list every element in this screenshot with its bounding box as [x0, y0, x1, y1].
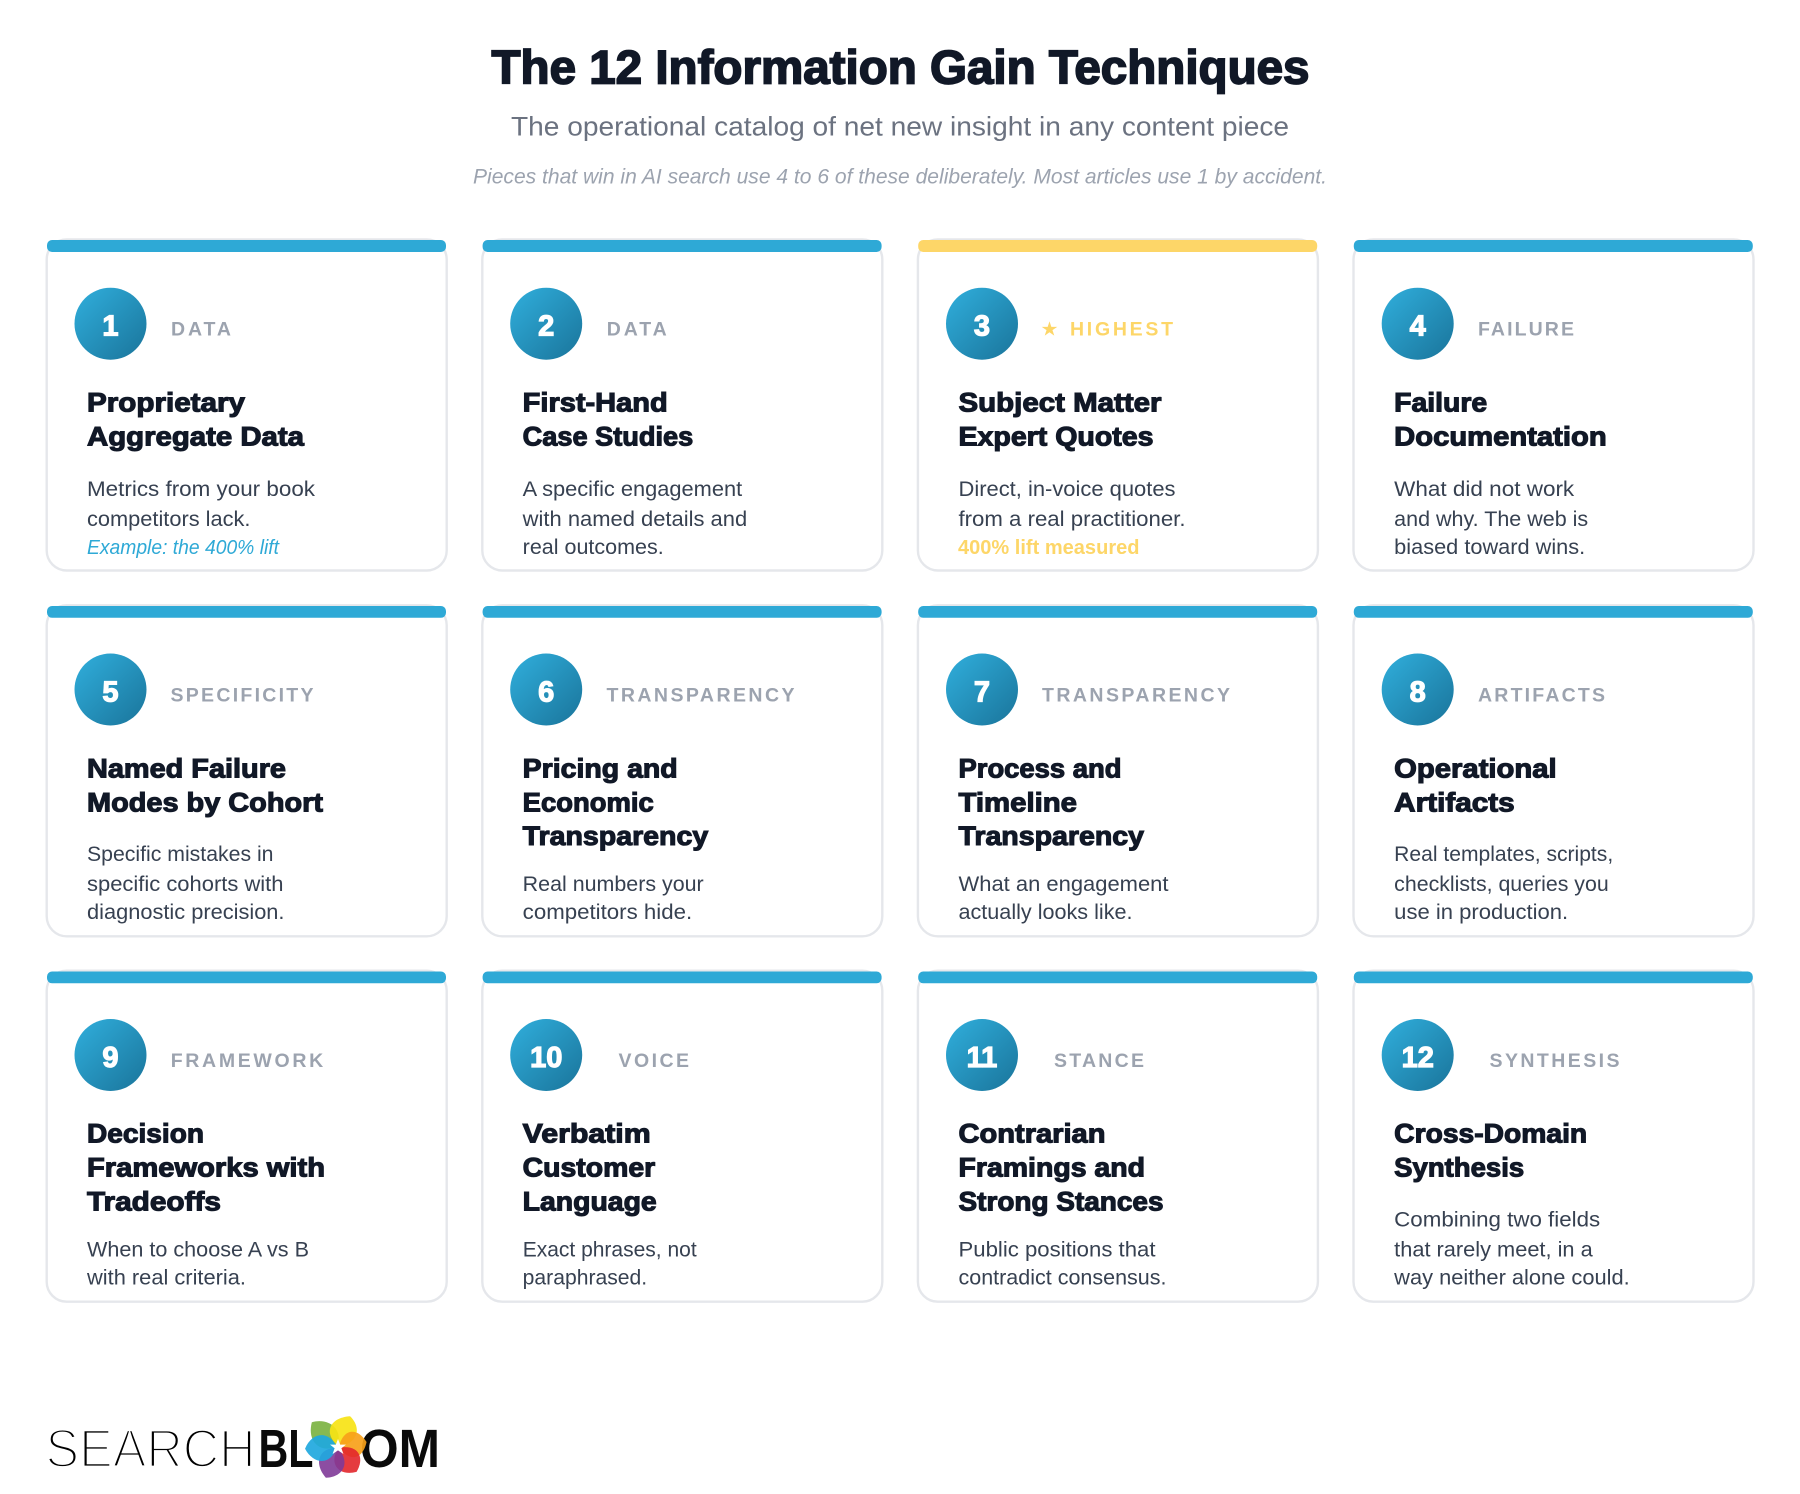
logo: Searchbloom: BL: [258, 1420, 314, 1479]
number badge 6: 6: [538, 676, 554, 708]
description: competitors hide.: [523, 901, 692, 924]
description: [958, 1239, 1166, 1290]
tag: artifacts: ARTIFACTS: [1478, 685, 1605, 707]
description: competitors lack.: [87, 508, 250, 531]
tag: voice: VOICE: [618, 1050, 689, 1072]
number badge 10: [510, 1019, 582, 1091]
description: Real templates, scripts,: [1394, 843, 1613, 866]
description: Exact phrases, not: [523, 1239, 697, 1262]
card 1: Proprietary Aggregate Data: [47, 240, 447, 570]
card 9: Decision Frameworks with Tradeoffs: [47, 971, 447, 1302]
description: paraphrased.: [523, 1267, 647, 1290]
description: [522, 478, 747, 559]
heading: Transparency: [523, 821, 708, 851]
number badge 11: [946, 1019, 1018, 1091]
heading: Named Failure: [87, 754, 286, 784]
description: [523, 1239, 697, 1290]
card 4: Failure Documentation: [1354, 240, 1754, 570]
tag: transparency: TRANSPARENCY: [606, 685, 794, 707]
heading: [87, 1119, 325, 1216]
description: [87, 478, 316, 559]
heading: Frameworks with: [87, 1153, 325, 1183]
tag: failure: FAILURE: [1478, 319, 1574, 341]
card 6: Pricing and Economic Transparency: [482, 605, 882, 936]
heading: [958, 388, 1162, 452]
description: Metrics from your book: [87, 478, 316, 501]
heading: Verbatim: [523, 1119, 651, 1149]
title: The 12 Information Gain Techniques: [492, 40, 1310, 93]
heading: Documentation: [1394, 422, 1607, 452]
number badge 5: [74, 654, 146, 726]
heading: [87, 754, 323, 818]
description: Combining two fields: [1394, 1209, 1600, 1232]
description: [523, 873, 704, 924]
heading: Decision: [87, 1119, 204, 1149]
number badge 2: 2: [538, 311, 554, 343]
description: Public positions that: [958, 1239, 1156, 1262]
number badge 8: 8: [1410, 676, 1426, 708]
number badge 4: [1382, 288, 1454, 360]
heading: [1394, 1119, 1587, 1183]
description: Direct, in-voice quotes: [958, 478, 1176, 501]
tag: framework: FRAMEWORK: [171, 1050, 323, 1072]
card 2: First-Hand Case Studies: [482, 240, 882, 570]
heading: First-Hand: [523, 388, 668, 418]
description: Real numbers your: [523, 873, 704, 896]
description: [958, 478, 1186, 559]
number badge 1: 1: [102, 311, 119, 343]
heading: Operational: [1394, 754, 1557, 784]
heading: Subject Matter: [958, 388, 1162, 418]
heading: [87, 388, 304, 452]
heading: [1394, 754, 1557, 818]
number badge 4: 4: [1410, 311, 1426, 343]
heading: Modes by Cohort: [87, 788, 323, 818]
heading: Contrarian: [958, 1119, 1106, 1149]
heading: [958, 754, 1144, 851]
tag: specificity: SPECIFICITY: [170, 685, 314, 707]
heading: Customer: [523, 1153, 655, 1183]
number badge 2: [510, 288, 582, 360]
heading: Strong Stances: [958, 1186, 1164, 1216]
number badge 5: 5: [102, 676, 119, 708]
heading: Synthesis: [1394, 1153, 1524, 1183]
description: biased toward wins.: [1394, 536, 1585, 559]
heading: [958, 1119, 1164, 1216]
description: use in production.: [1394, 901, 1568, 924]
card 5: Named Failure Modes by Cohort: [47, 605, 447, 936]
heading: Aggregate Data: [87, 422, 304, 452]
heading: [523, 388, 693, 452]
description: contradict consensus.: [958, 1267, 1166, 1290]
description: [86, 1239, 309, 1290]
tag: highest: HIGHEST: [1070, 319, 1173, 341]
logo: Searchbloom: OM: [360, 1420, 440, 1479]
number badge 11: 11: [967, 1042, 997, 1074]
heading: Language: [523, 1186, 657, 1216]
heading: [523, 1119, 657, 1216]
heading: Artifacts: [1394, 788, 1515, 818]
number badge 8: [1382, 654, 1454, 726]
description: and why. The web is: [1394, 508, 1588, 531]
description: way neither alone could.: [1393, 1267, 1630, 1290]
description: [1393, 1209, 1630, 1290]
heading: Process and: [958, 754, 1122, 784]
tag: stance: STANCE: [1054, 1050, 1144, 1072]
number badge 1: [74, 288, 146, 360]
card 7: Process and Timeline Transparency: [918, 605, 1318, 936]
card 8: Operational Artifacts: [1354, 605, 1754, 936]
number badge 10: 10: [530, 1042, 562, 1074]
subtitle: The operational catalog of net new insight in any content piece: [511, 112, 1289, 142]
heading: Tradeoffs: [87, 1186, 221, 1216]
description: checklists, queries you: [1394, 873, 1609, 896]
description: When to choose A vs B: [87, 1239, 309, 1262]
heading: Economic: [523, 788, 654, 818]
description: with named details and: [522, 508, 747, 531]
heading: Framings and: [958, 1153, 1145, 1183]
description: What did not work: [1394, 478, 1575, 501]
tag: data: DATA: [171, 319, 231, 341]
heading: Case Studies: [523, 422, 693, 452]
number badge 7: [946, 654, 1018, 726]
description: Specific mistakes in: [87, 843, 274, 866]
number badge 9: [74, 1019, 146, 1091]
card 10: Verbatim Customer Language: [482, 971, 882, 1302]
number badge 3: 3: [974, 311, 990, 343]
description: [1394, 478, 1588, 559]
heading: Cross-Domain: [1394, 1119, 1587, 1149]
description: [1394, 843, 1613, 924]
heading: Expert Quotes: [958, 422, 1154, 452]
logo: Searchbloom: SEARCH: [46, 1419, 256, 1479]
heading: Pricing and: [523, 754, 678, 784]
number badge 12: 12: [1402, 1042, 1434, 1074]
description: diagnostic precision.: [87, 901, 284, 924]
card 3: Subject Matter Expert Quotes (highest): [918, 240, 1318, 570]
description: with real criteria.: [86, 1267, 246, 1290]
description: actually looks like.: [958, 901, 1132, 924]
description: What an engagement: [958, 873, 1169, 896]
description: [958, 873, 1169, 924]
heading: Proprietary: [87, 388, 245, 418]
description: 400% lift measured: [958, 537, 1140, 559]
heading: Timeline: [958, 788, 1077, 818]
heading: Transparency: [958, 821, 1144, 851]
description: [87, 843, 284, 924]
description: A specific engagement: [523, 478, 742, 501]
tag: synthesis: SYNTHESIS: [1490, 1050, 1620, 1072]
heading: Failure: [1394, 388, 1487, 418]
heading: [1394, 388, 1607, 452]
heading: [523, 754, 708, 851]
number badge 12: [1382, 1019, 1454, 1091]
description: that rarely meet, in a: [1394, 1239, 1593, 1262]
description: from a real practitioner.: [958, 508, 1186, 531]
logo: Searchbloom: [46, 1412, 440, 1483]
number badge 3: [946, 288, 1018, 360]
card 12: Cross-Domain Synthesis: [1354, 971, 1754, 1302]
description: specific cohorts with: [87, 873, 284, 896]
card 11: Contrarian Framings and Strong Stances: [918, 971, 1318, 1302]
number badge 9: 9: [102, 1042, 119, 1074]
tag: highest: ★: [1040, 318, 1058, 341]
icon: flower: [303, 1412, 369, 1483]
description: Example: the 400% lift: [87, 536, 280, 559]
tag: transparency: TRANSPARENCY: [1042, 685, 1230, 707]
description: real outcomes.: [523, 536, 664, 559]
tag: data: DATA: [607, 319, 667, 341]
number badge 6: [510, 654, 582, 726]
number badge 7: 7: [974, 676, 990, 708]
note: Pieces that win in AI search use 4 to 6 of these deliberately. Most articles use 1 by accident.: [473, 165, 1327, 188]
